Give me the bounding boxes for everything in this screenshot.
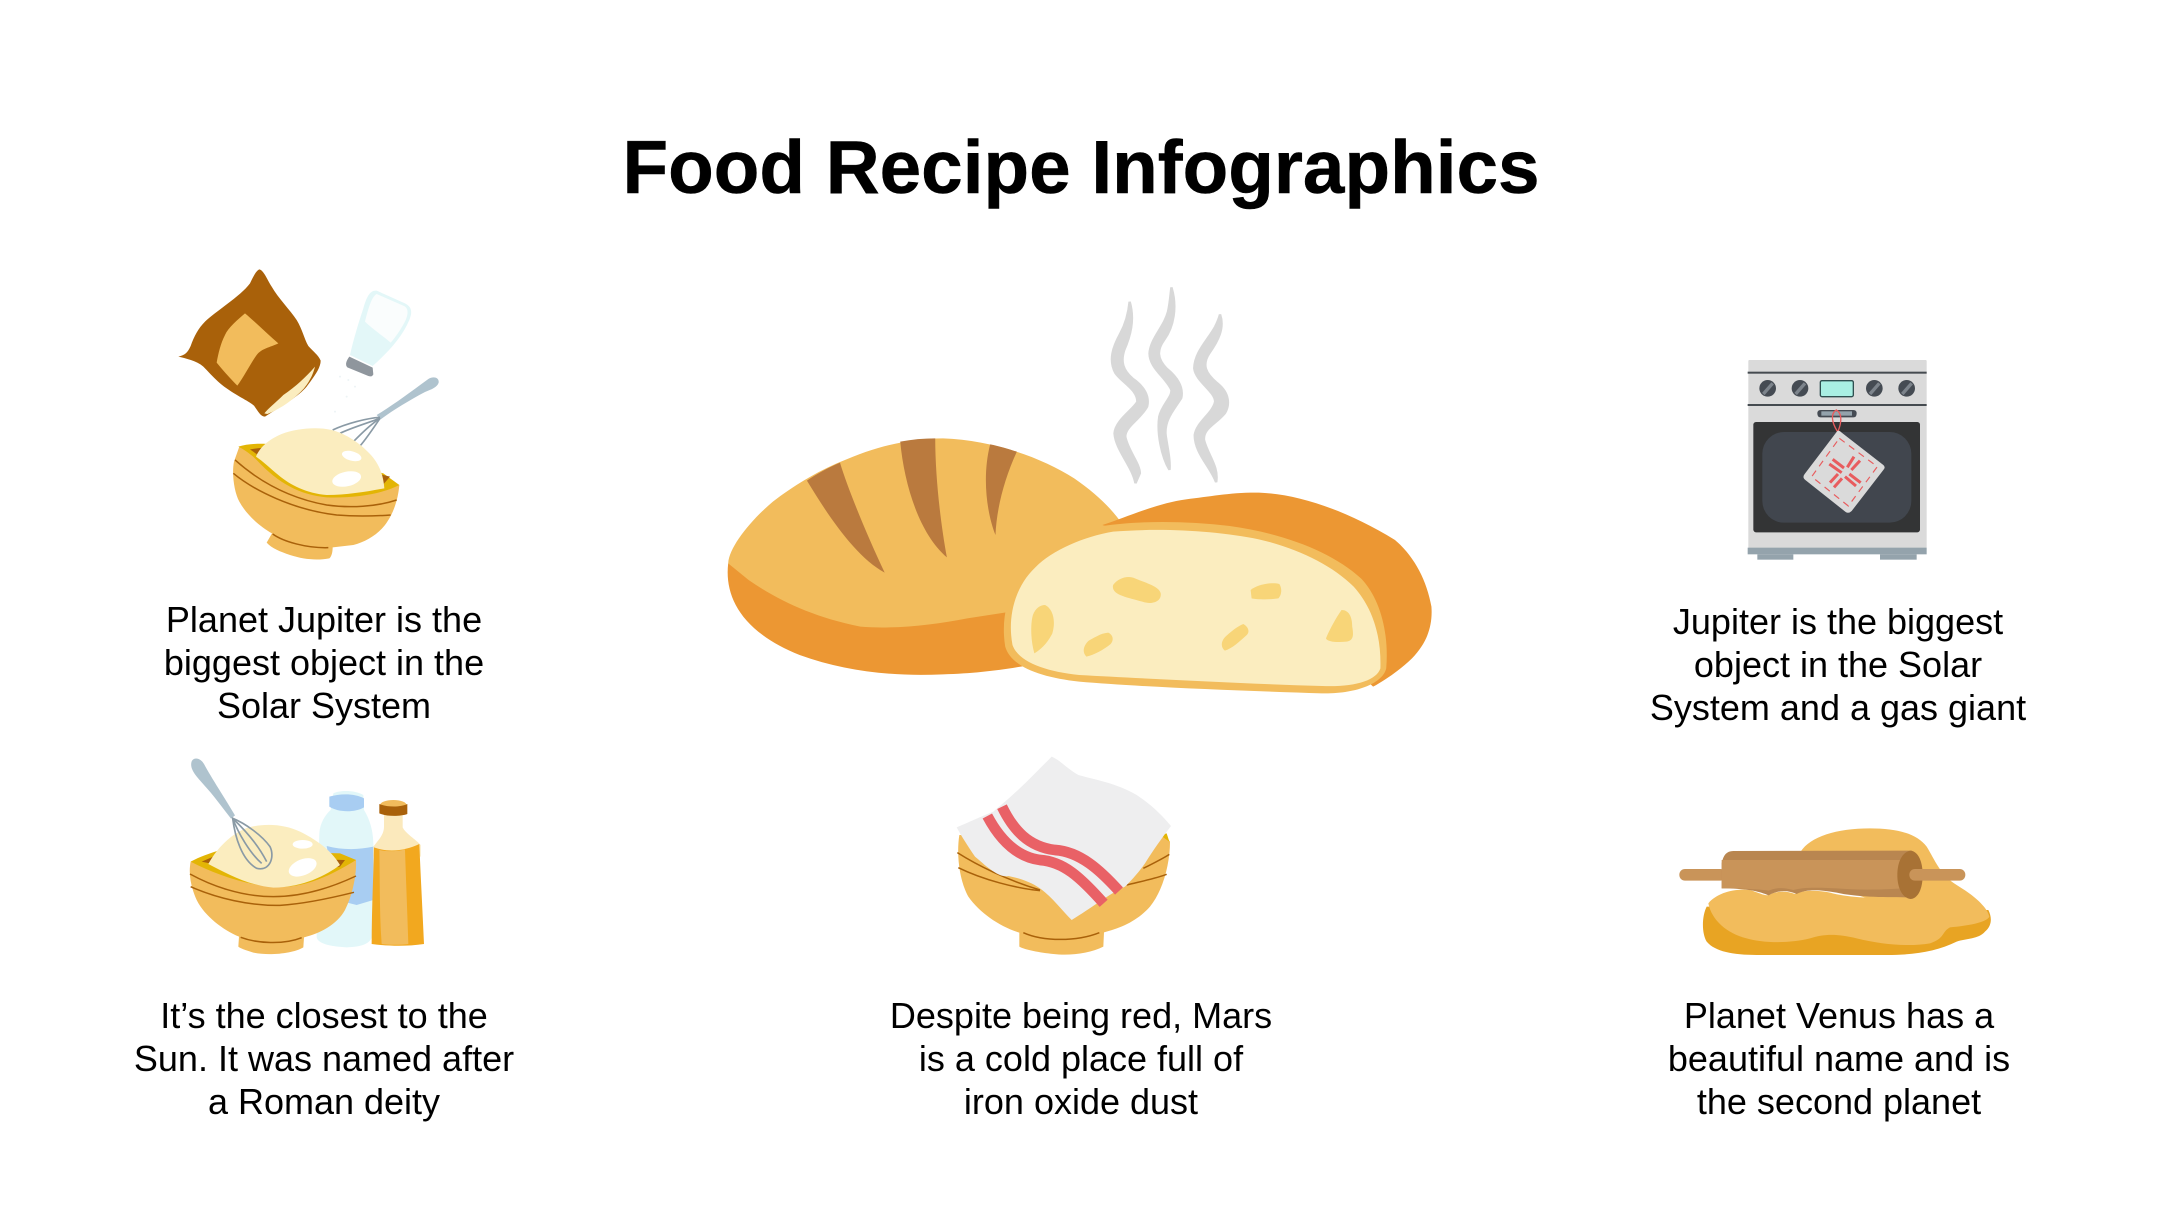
icon: bread loaves with steam	[728, 287, 1432, 693]
icon: oven with pot holder	[1748, 360, 1927, 560]
mixing bowl with dough	[190, 825, 356, 954]
text: closest to the sun: a Roman deity	[208, 1081, 440, 1122]
text: planet jupiter: Solar System	[217, 685, 431, 726]
text: closest to the sun	[134, 995, 514, 1122]
control knobs and display	[1759, 380, 1915, 397]
flour bag	[178, 269, 321, 417]
oven window	[1753, 422, 1920, 532]
text: mars: is a cold place full of	[919, 1038, 1244, 1079]
cut loaf	[1004, 493, 1432, 693]
mixing bowl with dough	[233, 428, 399, 559]
text: venus	[1668, 995, 2010, 1122]
text: planet jupiter: Planet Jupiter is the	[166, 599, 482, 640]
text: closest to the sun: It’s the closest to the	[160, 995, 488, 1036]
text: mars: Despite being red, Mars	[890, 995, 1272, 1036]
text: planet jupiter: biggest object in the	[164, 642, 484, 683]
whisk	[333, 377, 439, 446]
oven door handle	[1817, 410, 1857, 417]
icon: rolling pin on dough	[1679, 828, 1991, 955]
text: jupiter gas giant: Jupiter is the biggest	[1673, 601, 2003, 642]
milk bottle	[317, 791, 373, 947]
dough back	[1801, 828, 1989, 917]
text: closest to the sun: Sun. It was named after	[134, 1038, 514, 1079]
icon: bowl with whisk and bottles	[190, 759, 424, 954]
text: venus: the second planet	[1697, 1081, 1981, 1122]
dough base	[1703, 889, 1991, 955]
text: mars	[890, 995, 1272, 1122]
icon: flour bag, salt shaker, whisk and dough bowl	[178, 269, 439, 559]
text: mars: iron oxide dust	[964, 1081, 1198, 1122]
text: planet jupiter	[164, 599, 484, 726]
text: venus: Planet Venus has a	[1684, 995, 1995, 1036]
icon: bowl covered with towel	[957, 757, 1171, 955]
whisk	[191, 759, 272, 869]
oven body	[1748, 360, 1927, 560]
text: jupiter gas giant	[1650, 601, 2026, 728]
text: jupiter gas giant: object in the Solar	[1694, 644, 1982, 685]
title: Food Recipe Infographics	[622, 125, 1540, 209]
whole loaf	[728, 438, 1123, 675]
bowl	[957, 833, 1170, 955]
oil bottle	[372, 800, 424, 946]
text: jupiter gas giant: System and a gas giant	[1650, 687, 2026, 728]
salt shaker	[334, 291, 411, 413]
text: venus: beautiful name and is	[1668, 1038, 2010, 1079]
steam	[1112, 287, 1228, 483]
pot holder	[1803, 410, 1885, 513]
towel	[957, 757, 1171, 920]
rolling pin	[1679, 851, 1965, 899]
